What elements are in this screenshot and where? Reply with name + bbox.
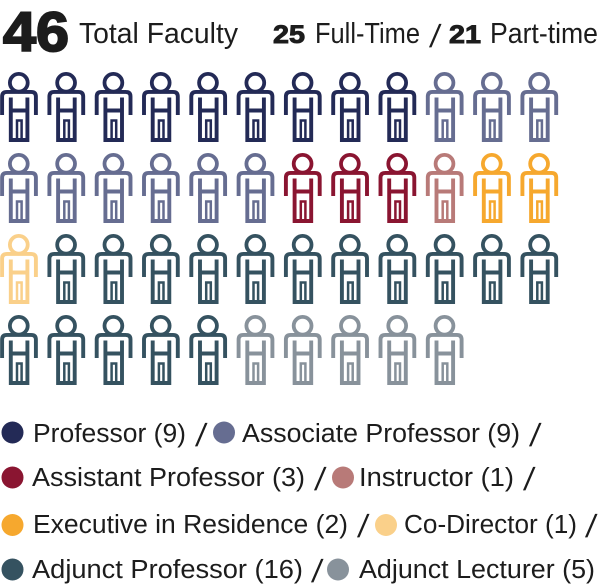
icons: assistant professors (3)	[286, 155, 414, 221]
legend row 2: /	[522, 461, 537, 497]
full-time and part-time counts: Full-Time	[315, 18, 420, 50]
icons: professors (9)	[2, 74, 414, 140]
icons: adjunct lecturers (5)	[239, 317, 462, 383]
icon: instructor (1)	[428, 155, 462, 221]
legend row 4: Adjunct Professor (16)	[32, 556, 303, 584]
icons: executives in residence (2)	[475, 155, 556, 221]
legend row 3	[2, 508, 599, 544]
legend row 1: /	[528, 417, 543, 453]
legend row 1: /	[194, 417, 209, 453]
full-time and part-time counts: 25	[273, 21, 305, 49]
big number 46: 46	[3, 0, 69, 63]
legend row 4	[2, 553, 595, 586]
full-time and part-time counts: 21	[449, 21, 481, 49]
legend row 1	[2, 417, 543, 453]
icons: associate professors (9)	[2, 74, 556, 221]
legend row 2: Instructor (1)	[359, 464, 514, 492]
legend row 3: /	[356, 508, 371, 544]
icons: adjunct professors (16)	[2, 236, 556, 383]
legend row 2: Assistant Professor (3)	[32, 464, 305, 492]
full-time and part-time counts: /	[428, 18, 443, 54]
legend row 1: Professor (9)	[33, 420, 186, 448]
headline: total faculty	[3, 0, 238, 63]
legend row 1: Associate Professor (9)	[242, 420, 520, 448]
legend	[2, 417, 599, 586]
pictogram grid: 46 faculty figures	[2, 74, 556, 383]
legend row 3: Co-Director (1)	[404, 511, 577, 539]
icon: co-director (1)	[2, 236, 36, 302]
legend row 3: /	[584, 508, 599, 544]
full-time and part-time counts	[273, 18, 598, 54]
legend row 2: /	[313, 461, 328, 497]
legend row 4: Adjunct Lecturer (5)	[359, 556, 595, 584]
legend row 2	[2, 461, 537, 497]
legend row 3: Executive in Residence (2)	[33, 511, 348, 539]
total faculty label: Total Faculty	[79, 18, 238, 50]
